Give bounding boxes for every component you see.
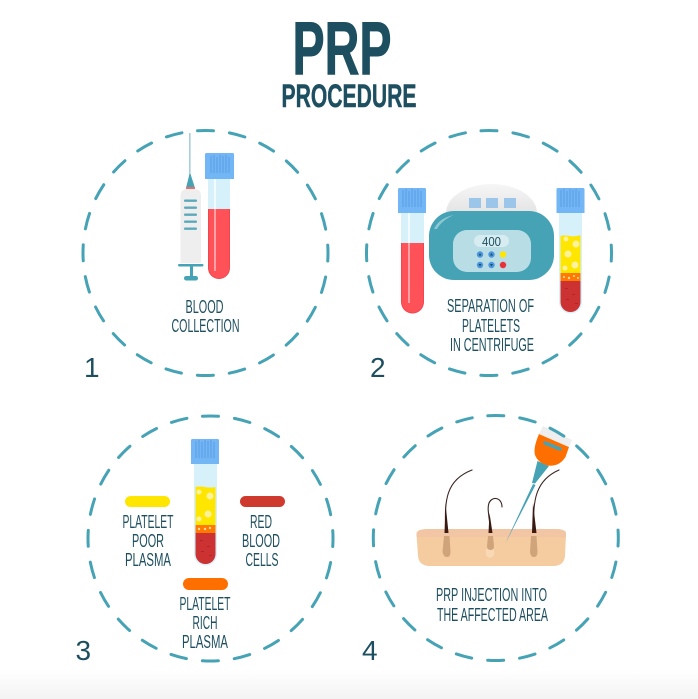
label: separation: SEPARATION OF <box>447 295 534 316</box>
legend bar: platelet rich plasma <box>183 578 228 590</box>
label: separation: IN CENTRIFUGE <box>450 334 534 355</box>
label: platelet rich plasma: PLATELET <box>180 593 230 614</box>
label: prp injection <box>436 584 548 625</box>
label: prp injection: THE AFFECTED AREA <box>437 604 548 625</box>
buttons <box>477 251 506 268</box>
label: platelet rich plasma: RICH <box>192 612 218 633</box>
panel: step 2 centrifuge <box>359 123 619 383</box>
label: red blood cells <box>242 511 280 570</box>
label: platelet rich plasma: PLASMA <box>182 631 228 652</box>
display: 400 <box>482 234 501 249</box>
title: PRP <box>292 6 392 90</box>
icon: centrifuge <box>429 184 554 280</box>
number 2: 2 <box>370 352 386 383</box>
number 3: 3 <box>76 635 91 666</box>
icon: layered tube <box>191 439 219 566</box>
label: blood collection: BLOOD <box>186 296 224 317</box>
label: platelet poor plasma <box>122 511 174 570</box>
legend bar: red blood cells <box>240 496 285 507</box>
icon: injection needle <box>505 426 572 544</box>
label: platelet poor plasma: POOR <box>132 530 164 551</box>
title: PROCEDURE <box>282 78 416 114</box>
label: prp injection: PRP INJECTION INTO <box>436 584 547 605</box>
label: blood collection <box>172 296 240 336</box>
title <box>282 6 416 114</box>
label: platelet rich plasma <box>180 593 230 652</box>
icon: separated tube <box>556 188 584 314</box>
panel: step 3 plasma layers <box>76 408 341 669</box>
label: blood collection: COLLECTION <box>172 315 240 336</box>
label: separation <box>447 295 534 355</box>
label: red blood cells: CELLS <box>246 549 278 570</box>
label: platelet poor plasma: PLASMA <box>125 549 171 570</box>
icon: red tube <box>398 188 426 314</box>
panel: step 4 injection <box>362 408 626 668</box>
label: red blood cells: RED <box>250 511 272 532</box>
legend bar: platelet poor plasma <box>125 496 170 507</box>
label: red blood cells: BLOOD <box>242 530 280 551</box>
number 4: 4 <box>362 635 378 666</box>
icon: skin with hair <box>416 470 566 566</box>
panel: step 1 blood collection <box>75 123 336 383</box>
label: separation: PLATELETS <box>462 315 520 336</box>
icon: blood tube <box>205 153 234 279</box>
label: platelet poor plasma: PLATELET <box>122 511 174 532</box>
icon: syringe <box>178 133 204 280</box>
number 1: 1 <box>84 352 100 383</box>
